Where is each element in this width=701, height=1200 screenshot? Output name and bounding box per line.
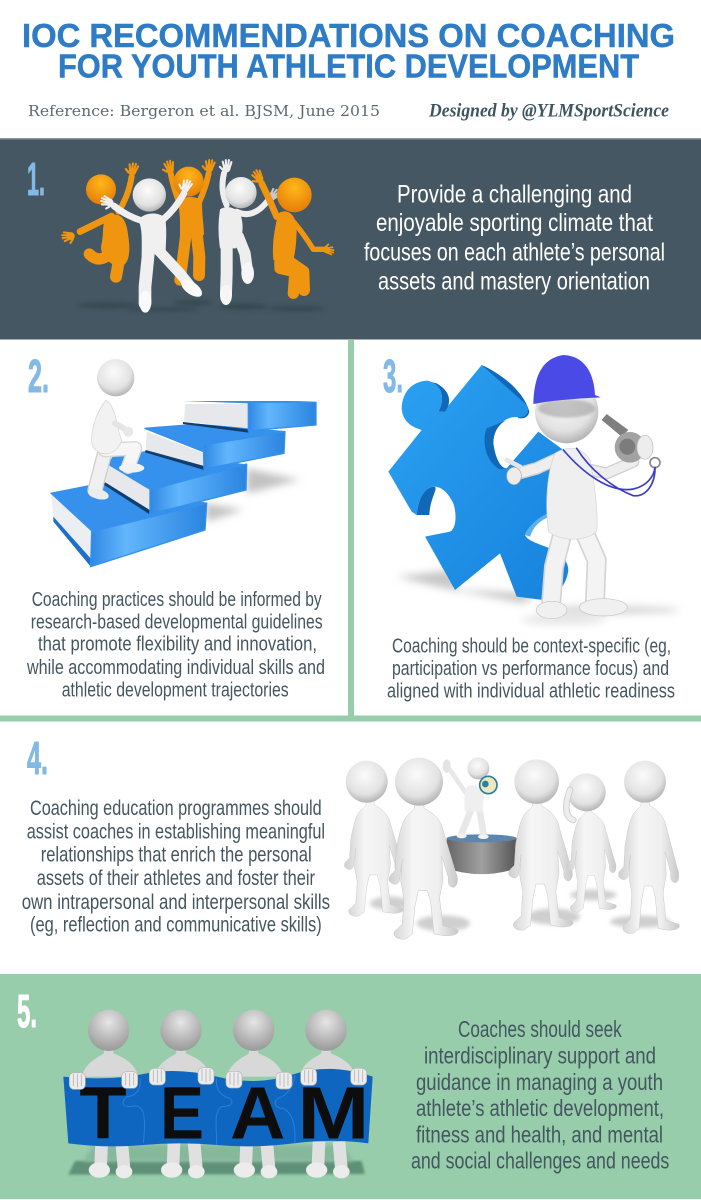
TEAM banner: T — [79, 1071, 127, 1154]
lanyard — [563, 450, 655, 490]
text block 2: that promote flexibility and innovation, — [38, 632, 317, 656]
text block 2: athletic development trajectories — [62, 679, 289, 702]
panel 1: sporting climate — [0, 138, 701, 340]
figure — [87, 359, 144, 502]
book 4 — [182, 401, 316, 433]
TEAM banner: A — [230, 1071, 285, 1154]
text block 4: assets of their athletes and foster their — [37, 867, 315, 890]
number 3: 3. — [383, 350, 403, 402]
illustration: figure climbing books — [51, 359, 316, 567]
TEAM banner: E — [160, 1071, 204, 1154]
TEAM banner: M — [297, 1071, 369, 1154]
title: FOR YOUTH ATHLETIC DEVELOPMENT — [58, 48, 639, 84]
title — [22, 17, 675, 84]
panel 4: coaching education — [22, 732, 679, 939]
gripping hands — [69, 1068, 367, 1089]
panel 1: sporting climate: 1. — [27, 153, 45, 205]
panel 5: interdisciplinary support — [0, 974, 701, 1199]
puzzle piece — [388, 365, 590, 600]
number 4: 4. — [27, 732, 48, 784]
text block 4 — [22, 797, 330, 937]
book 2 — [102, 452, 247, 514]
header — [22, 17, 675, 122]
text block 2 — [26, 588, 325, 702]
panel 3: context-specific coaching — [383, 350, 680, 703]
title: IOC RECOMMENDATIONS ON COACHING — [22, 17, 675, 54]
section dividers — [0, 340, 701, 722]
text block 2: Coaching practices should be informed by — [32, 588, 322, 611]
illustration: coach with puzzle piece — [388, 355, 680, 624]
book 1 — [51, 483, 207, 567]
illustration: jumping figures — [62, 159, 335, 313]
text block 2: while accommodating individual skills and — [26, 656, 325, 679]
TEAM banner — [63, 1069, 373, 1154]
text block 4: Coaching education programmes should — [30, 797, 322, 820]
text block 2: research-based developmental guidelines — [31, 611, 323, 634]
reference line: Reference: Bergeron et al. BJSM, June 2015 — [28, 102, 380, 120]
book 3 — [145, 424, 285, 470]
number 5: 5. — [17, 985, 37, 1037]
figure 1 — [344, 761, 403, 916]
platform — [447, 834, 517, 874]
figure 3 — [509, 759, 573, 930]
text block 5 — [411, 1016, 669, 1173]
text block 4: (eg, reflection and communicative skills) — [30, 914, 322, 937]
designer credit: Designed by @YLMSportScience — [428, 100, 670, 122]
speaker with megaphone — [443, 757, 497, 839]
illustration: group around speaker — [344, 757, 679, 939]
text block 3 — [387, 634, 675, 703]
whistle — [602, 414, 660, 468]
text block 4: relationships that enrich the personal — [41, 844, 312, 867]
figure 5 — [619, 761, 679, 934]
text block 1: Provide a challenging and — [397, 181, 632, 209]
text block 4: assist coaches in establishing meaningful — [27, 820, 325, 843]
figure 4 — [566, 773, 616, 912]
text block 1 — [364, 181, 665, 295]
text block 5: Coaches should seek — [458, 1016, 622, 1042]
panel 2: developmental guidelines — [26, 350, 325, 702]
coach figure — [507, 355, 660, 619]
figures — [82, 1010, 356, 1178]
number 2: 2. — [28, 350, 49, 402]
cap — [533, 355, 601, 404]
illustration: team figures with banner — [63, 1010, 373, 1178]
text block 4: own intrapersonal and interpersonal skills — [22, 891, 330, 914]
figure 2 — [389, 758, 458, 939]
